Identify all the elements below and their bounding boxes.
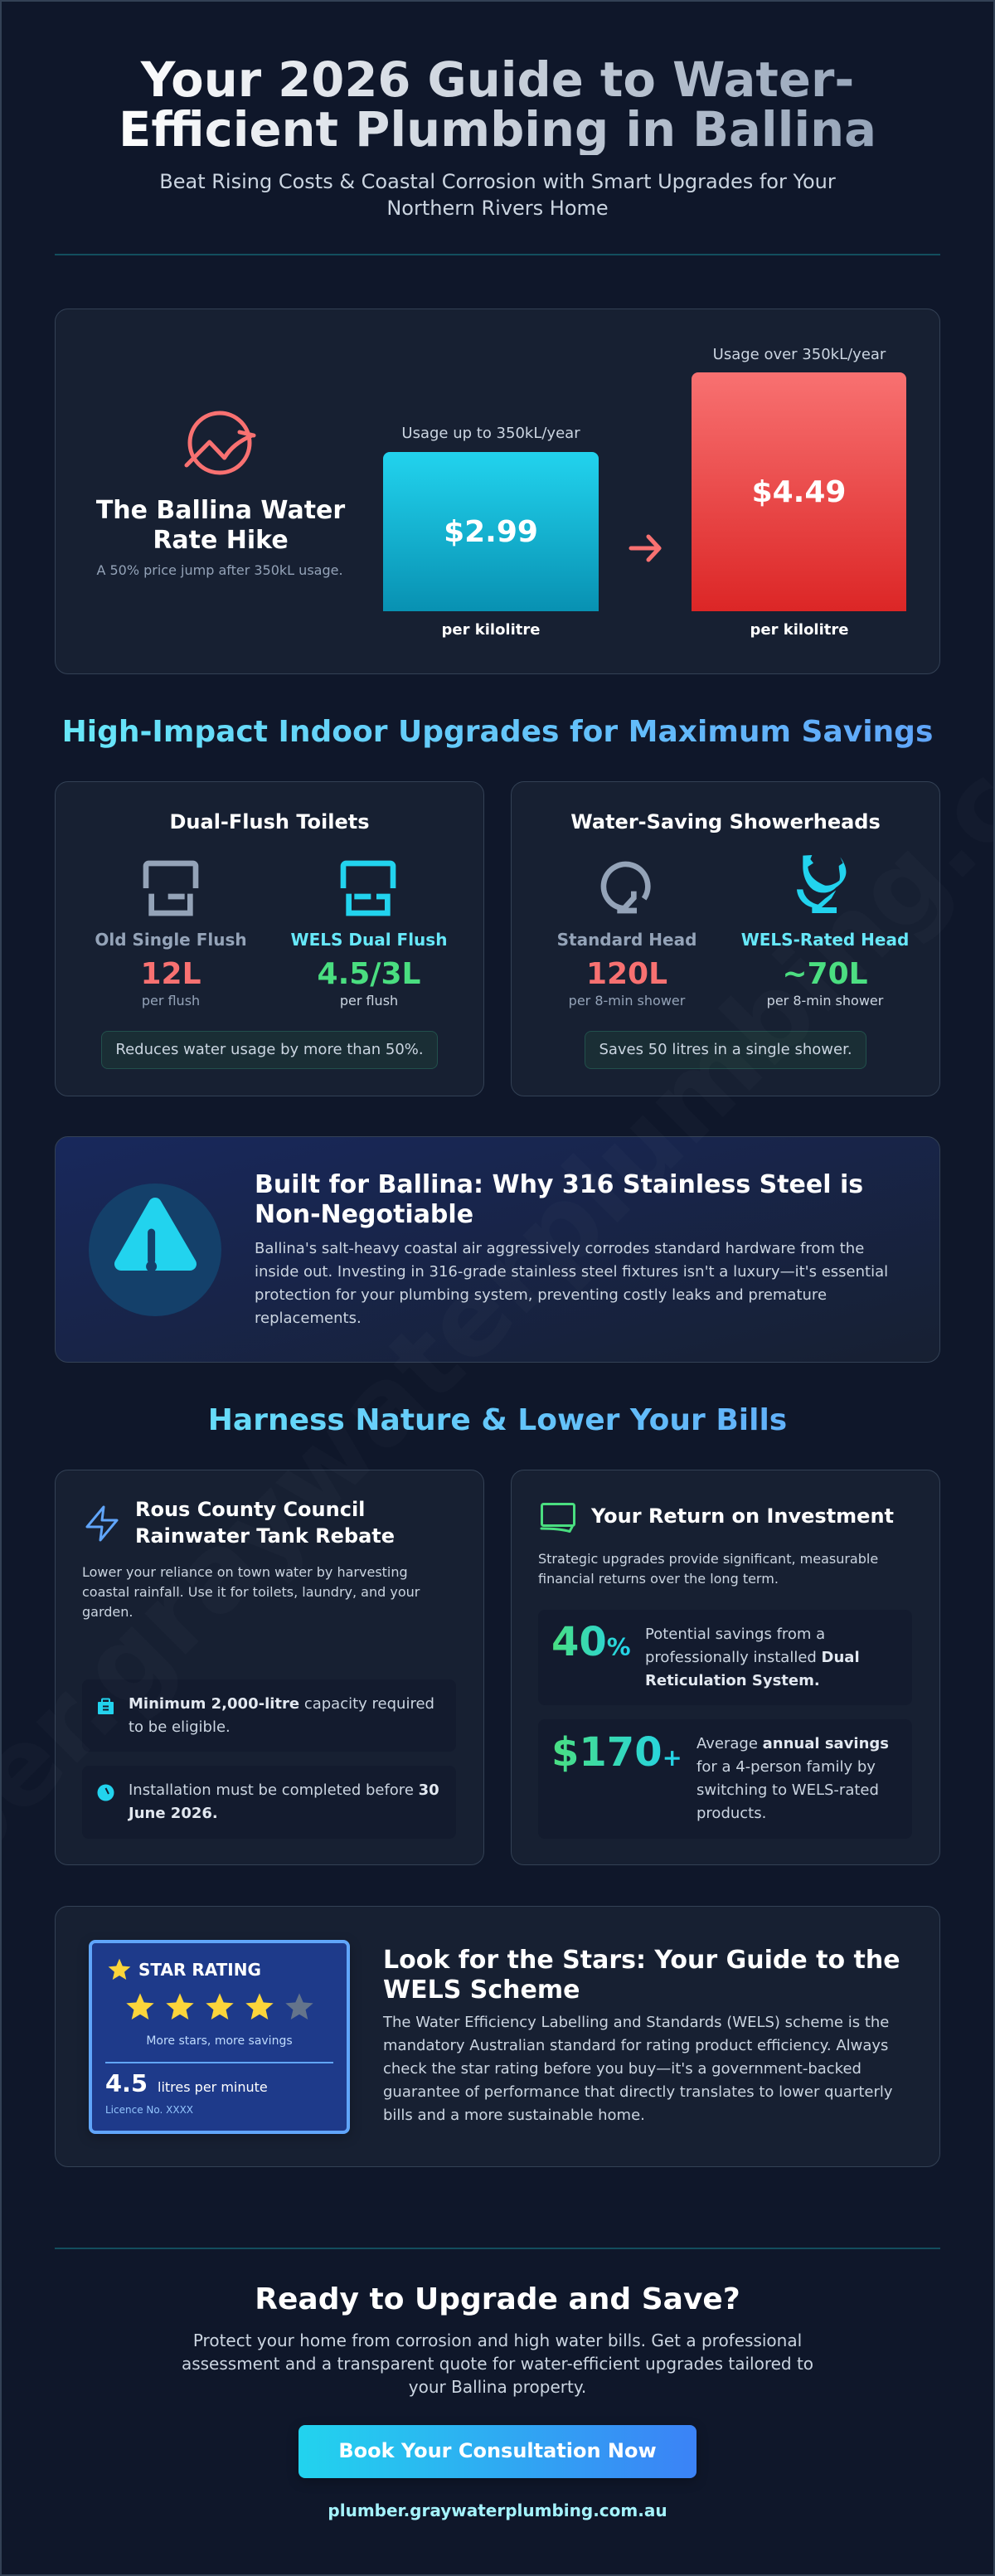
bar: standard rate: $2.99 xyxy=(444,515,538,549)
rebate heading: Rous County Council xyxy=(135,1498,365,1521)
old toilet label: Old Single Flush xyxy=(95,930,247,950)
rebate body: coastal rainfall. Use it for toilets, laundry, and your xyxy=(82,1584,420,1600)
stat description: products. xyxy=(696,1805,766,1822)
callout: shower savings: Saves 50 litres in a single shower. xyxy=(599,1041,852,1058)
label title: STAR RATING xyxy=(138,1960,261,1980)
WELS head label: WELS-Rated Head xyxy=(741,930,909,950)
panel: rainwater rebate xyxy=(55,1470,484,1865)
stat description: Reticulation System. xyxy=(645,1672,820,1689)
callout: toilet savings: Reduces water usage by more than 50%. xyxy=(115,1041,424,1058)
WELS body: guarantee of performance that directly translates to lower quarterly xyxy=(383,2083,893,2101)
rate hike heading: Rate Hike xyxy=(153,526,289,555)
new toilet label: WELS Dual Flush xyxy=(291,930,447,950)
icon: standard showerhead xyxy=(600,861,651,914)
panel: rate hike xyxy=(55,309,940,674)
stat description: for a 4-person family by xyxy=(696,1758,876,1776)
panel: WELS scheme xyxy=(55,1906,940,2167)
subtitle xyxy=(159,170,836,220)
stainless body: Ballina's salt-heavy coastal air aggressively corrodes standard hardware from the xyxy=(255,1240,864,1257)
panel: return on investment xyxy=(511,1470,940,1865)
icon: clock xyxy=(98,1785,114,1801)
CTA body: assessment and a transparent quote for water-efficient upgrades tailored to xyxy=(182,2354,813,2374)
stat value $170+: $170+ xyxy=(551,1729,682,1776)
deadline text: June 2026. xyxy=(129,1805,218,1822)
heading: indoor upgrades: High-Impact Indoor Upgrades for Maximum Savings xyxy=(62,715,933,749)
callout: shower savings xyxy=(585,1031,866,1069)
WELS body: mandatory Australian standard for rating product efficiency. Always xyxy=(383,2037,888,2054)
heading: harness nature: Harness Nature & Lower Your Bills xyxy=(208,1403,787,1437)
ROI body xyxy=(538,1551,878,1587)
CTA heading: Ready to Upgrade and Save? xyxy=(255,2282,740,2316)
old toilet unit: per flush xyxy=(142,993,200,1009)
icon: old toilet xyxy=(143,861,199,916)
panel: showerheads xyxy=(511,781,940,1096)
ROI stat: annual savings xyxy=(538,1719,912,1839)
label flow rate: 4.5 litres per minute xyxy=(105,2069,268,2097)
rebate requirement: capacity xyxy=(82,1679,456,1752)
stainless heading: Non-Negotiable xyxy=(255,1200,473,1229)
stainless heading xyxy=(255,1170,863,1229)
callout: toilet savings xyxy=(101,1031,438,1069)
icon: rising chart in circle xyxy=(184,411,255,474)
CTA body: Protect your home from corrosion and high water bills. Get a professional xyxy=(193,2331,802,2350)
ROI stat: dual reticulation xyxy=(538,1610,912,1705)
rebate body: garden. xyxy=(82,1604,133,1620)
title: Efficient Plumbing in Ballina xyxy=(119,102,876,158)
rebate body: Lower your reliance on town water by harvesting xyxy=(82,1564,408,1580)
capacity text: to be eligible. xyxy=(129,1718,231,1736)
bar: high rate xyxy=(692,372,906,611)
CTA button: Book Your Consultation Now xyxy=(338,2439,657,2462)
rebate body xyxy=(82,1564,420,1620)
rebate heading: Rainwater Tank Rebate xyxy=(135,1524,395,1548)
stainless body xyxy=(255,1240,888,1327)
stat description xyxy=(645,1626,860,1689)
subtitle: Beat Rising Costs & Coastal Corrosion with Smart Upgrades for Your xyxy=(159,170,836,193)
rebate heading xyxy=(135,1498,395,1548)
capacity text: Minimum 2,000-litre capacity required xyxy=(129,1695,434,1713)
WELS body: bills and a more sustainable home. xyxy=(383,2107,645,2124)
WELS head unit: per 8-min shower xyxy=(767,993,883,1009)
toilets heading: Dual-Flush Toilets xyxy=(169,810,369,834)
stat value 40%: 40% xyxy=(551,1619,631,1665)
bar unit: high rate: per kilolitre xyxy=(750,621,848,639)
standard head value: 120L xyxy=(586,957,667,991)
stat description: professionally installed Dual xyxy=(645,1649,860,1666)
icon: label star xyxy=(108,1959,131,1980)
ROI body: financial returns over the long term. xyxy=(538,1571,779,1587)
WELS body: The Water Efficiency Labelling and Standards (WELS) scheme is the xyxy=(383,2014,889,2031)
WELS body xyxy=(383,2014,893,2124)
WELS heading xyxy=(383,1946,900,2005)
old toilet value: 12L xyxy=(140,957,201,991)
bar label: high rate: Usage over 350kL/year xyxy=(713,346,886,363)
rebate requirement: deadline xyxy=(82,1766,456,1839)
rate hike heading xyxy=(96,496,345,555)
stainless body: protection for your plumbing system, preventing costly leaks and premature xyxy=(255,1286,827,1304)
rate hike heading: The Ballina Water xyxy=(96,496,345,525)
ROI heading: Your Return on Investment xyxy=(591,1504,894,1528)
icon: arrow xyxy=(629,534,662,562)
stainless body: inside out. Investing in 316-grade stainless steel fixtures isn't a luxury—it's essential xyxy=(255,1263,888,1281)
capacity text xyxy=(129,1695,434,1736)
CTA body xyxy=(182,2331,813,2397)
deadline text xyxy=(128,1781,439,1822)
showerheads heading: Water-Saving Showerheads xyxy=(570,810,881,834)
bar: high rate: $4.49 xyxy=(752,475,846,509)
label licence: Licence No. XXXX xyxy=(105,2104,193,2116)
panel: stainless steel xyxy=(55,1136,940,1363)
icon: banknote xyxy=(541,1503,575,1533)
website link: plumber.graywaterplumbing.com.au xyxy=(328,2501,667,2520)
ROI body: Strategic upgrades provide significant, measurable xyxy=(538,1551,878,1567)
standard head unit: per 8-min shower xyxy=(569,993,685,1009)
bar unit: standard rate: per kilolitre xyxy=(442,621,540,639)
panel: dual-flush toilets xyxy=(55,781,484,1096)
CTA body: your Ballina property. xyxy=(409,2377,586,2397)
new toilet unit: per flush xyxy=(340,993,398,1009)
stainless body: replacements. xyxy=(255,1310,362,1327)
label tagline: More stars, more savings xyxy=(146,2034,293,2048)
stainless heading: Built for Ballina: Why 316 Stainless Steel is xyxy=(255,1170,863,1199)
deadline text: Installation must be completed before 30 xyxy=(129,1781,439,1799)
subtitle: Northern Rivers Home xyxy=(386,197,609,220)
icon: WELS showerhead xyxy=(797,855,846,913)
WELS heading: Look for the Stars: Your Guide to the xyxy=(383,1946,900,1975)
bar: standard rate xyxy=(383,452,599,611)
title: Your 2026 Guide to Water- xyxy=(141,52,854,108)
new toilet value: 4.5/3L xyxy=(318,957,420,991)
stat description: Average annual savings xyxy=(696,1735,889,1752)
stat description: switching to WELS-rated xyxy=(696,1781,879,1799)
WELS head value: ~70L xyxy=(782,957,868,991)
icon: warning in circle xyxy=(89,1184,221,1316)
stat description xyxy=(696,1735,889,1822)
standard head label: Standard Head xyxy=(557,930,696,950)
icon: briefcase xyxy=(98,1699,114,1714)
stat description: Potential savings from a xyxy=(645,1626,825,1643)
icon: dual flush toilet xyxy=(340,861,396,916)
CTA button xyxy=(298,2425,696,2478)
WELS star rating label xyxy=(89,1940,350,2134)
five star row xyxy=(126,1994,313,2019)
bar label: standard rate: Usage up to 350kL/year xyxy=(401,425,580,442)
WELS heading: WELS Scheme xyxy=(383,1976,580,2005)
heading: harness nature xyxy=(55,1401,940,1441)
title xyxy=(108,56,887,155)
WELS body: check the star rating before you buy—it's a government-backed xyxy=(383,2060,862,2078)
rate hike caption: A 50% price jump after 350kL usage. xyxy=(96,562,343,578)
icon: lightning bolt xyxy=(85,1506,119,1541)
